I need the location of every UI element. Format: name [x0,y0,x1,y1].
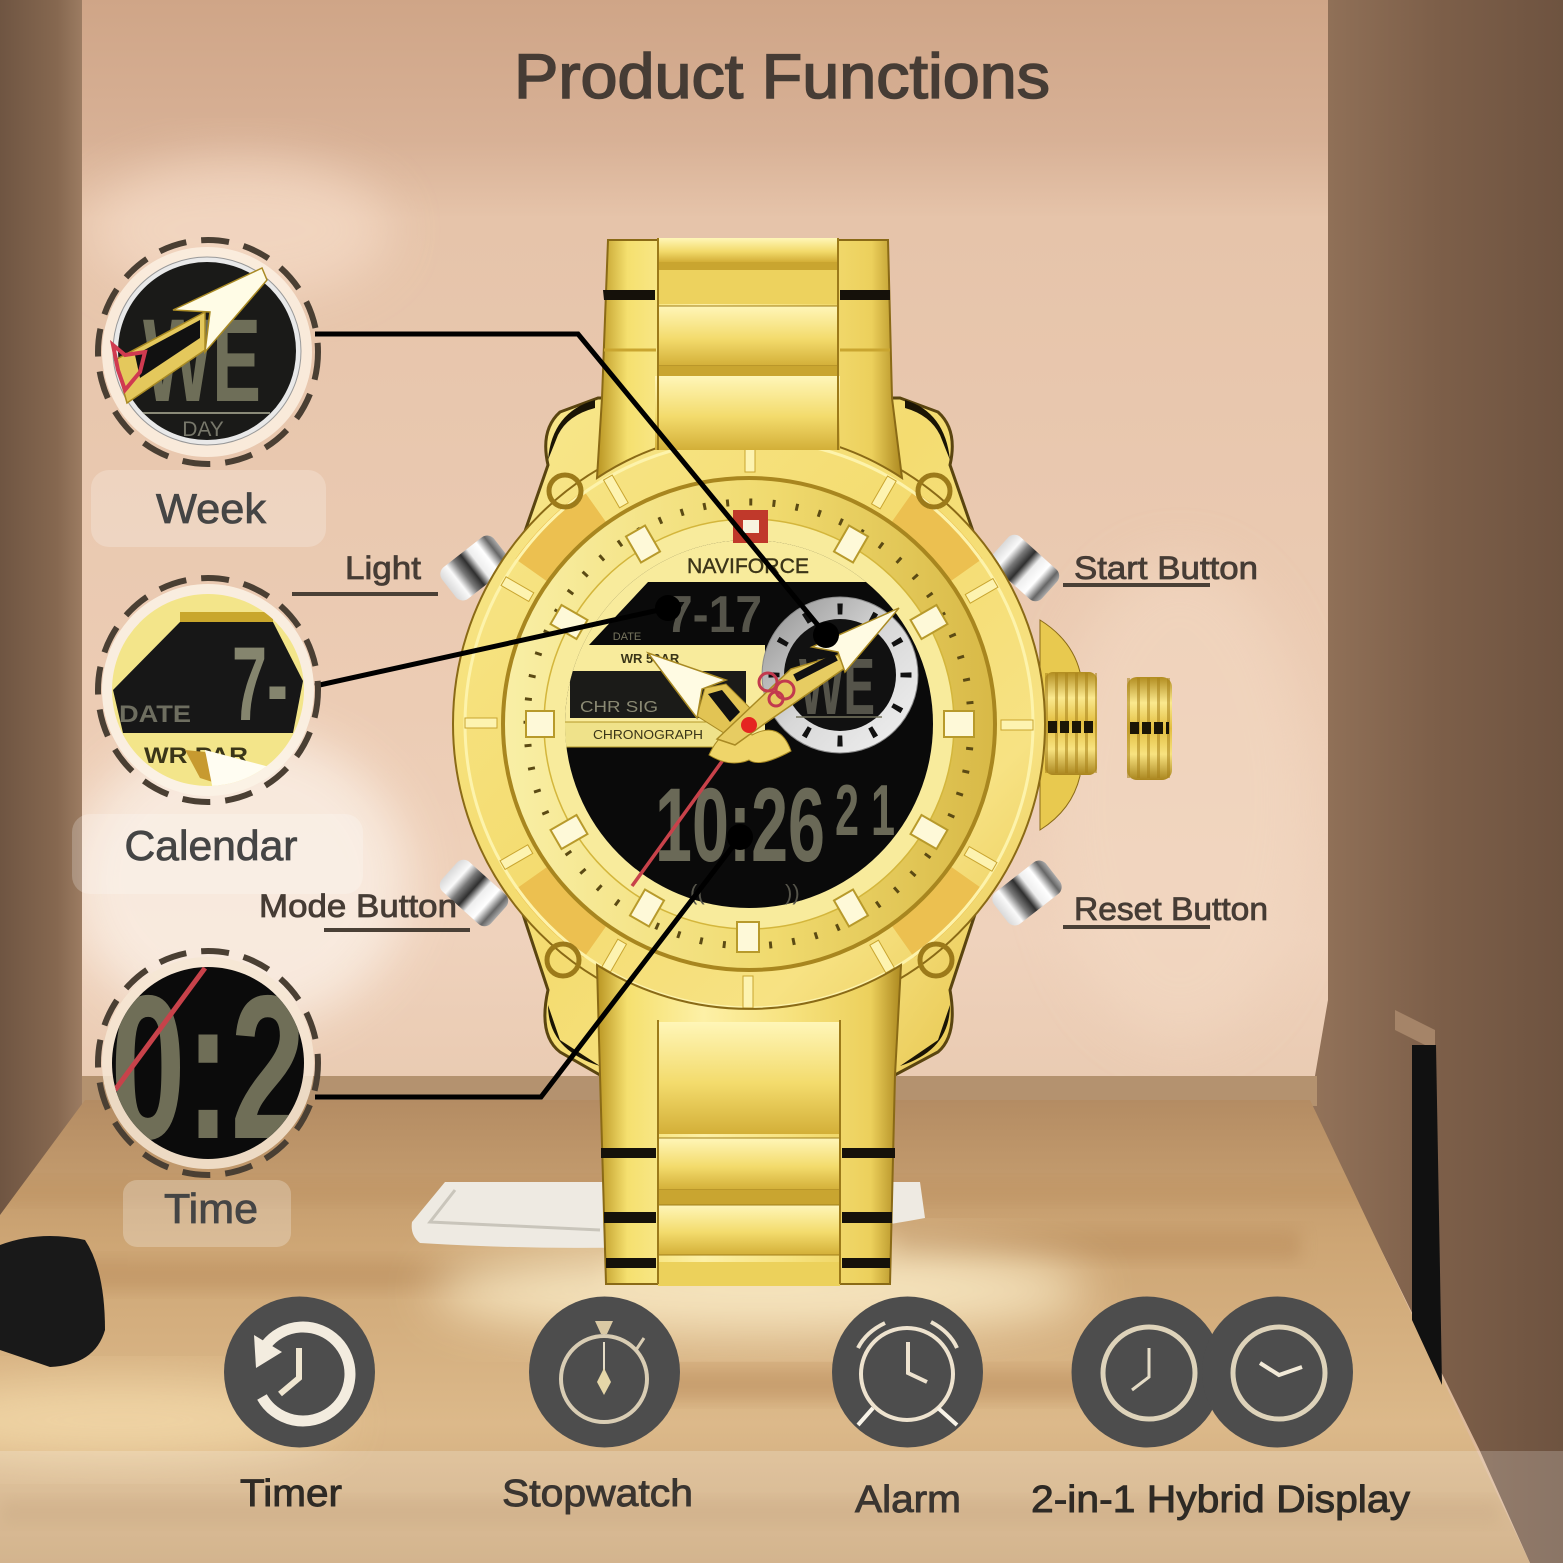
inset: time [98,951,320,1182]
case [453,428,1045,1020]
dial: (( [690,880,705,905]
title: Product Functions [514,42,1050,112]
caption: timer: Timer [240,1473,342,1515]
callout line: time [315,837,740,1097]
dial: )) [785,880,800,905]
watch [436,238,1172,1286]
label: week: Week [156,485,267,532]
bracelet lower [597,965,901,1286]
icon: timer [224,1296,375,1448]
label: calendar [72,814,363,894]
label: week [91,470,326,547]
inset: calendar: WR PAR [144,743,248,768]
caption: stopwatch: Stopwatch [502,1473,693,1515]
pushers [436,531,1065,930]
inset: week: DAY [182,418,224,441]
dial: CHR SIG [580,699,658,716]
callout dot: time [727,824,753,850]
icon: hybrid display digital [1202,1296,1353,1448]
dial: DATE [613,631,641,643]
icon: alarm [832,1296,983,1448]
label: reset button: Reset Button [1074,891,1268,927]
dial [560,540,940,910]
dial: 7-17 [666,586,762,644]
screws [547,475,952,976]
label: time: Time [164,1185,258,1232]
label: light [292,550,438,596]
callout dot: week [813,622,839,648]
inset: week: WE [143,295,261,427]
callout line: calendar [315,608,668,686]
hour markers [526,526,974,952]
dial: CHRONOGRAPH [593,727,703,742]
logo [733,510,768,543]
caption: alarm: Alarm [855,1479,961,1521]
caption: hybrid display: 2-in-1 Hybrid Display [1031,1479,1410,1521]
label: light: Light [345,550,421,586]
inset: time: 0:2 [110,953,306,1182]
case lugs [515,398,983,1075]
label: start button: Start Button [1074,550,1258,586]
inset: calendar: DATE [119,701,191,728]
bezel marks [465,440,1033,1008]
label: time [123,1180,291,1247]
lug shadows [548,400,950,1066]
label: mode button: Mode Button [259,888,457,924]
inset: calendar: 7- [232,626,288,743]
dial: 10:26 [655,767,825,884]
icon: hybrid display analog [1072,1296,1222,1448]
dial: 2 1 [835,771,895,851]
subdial: WE [799,642,875,731]
bracelet upper [597,238,902,478]
subdial [762,597,918,753]
icon: stopwatch [529,1296,680,1448]
chapter ring [503,478,995,970]
watch hands [632,608,899,886]
callout line: week [315,334,826,635]
crown and detached crown [1040,620,1172,830]
inset: calendar [98,578,320,802]
callout dot: calendar [655,595,681,621]
bottom caption band [0,1451,1563,1563]
inset: week [98,240,320,464]
dial: NAVIFORCE [687,555,809,578]
label: calendar: Calendar [124,822,298,869]
dial: WR 50AR [621,651,680,666]
